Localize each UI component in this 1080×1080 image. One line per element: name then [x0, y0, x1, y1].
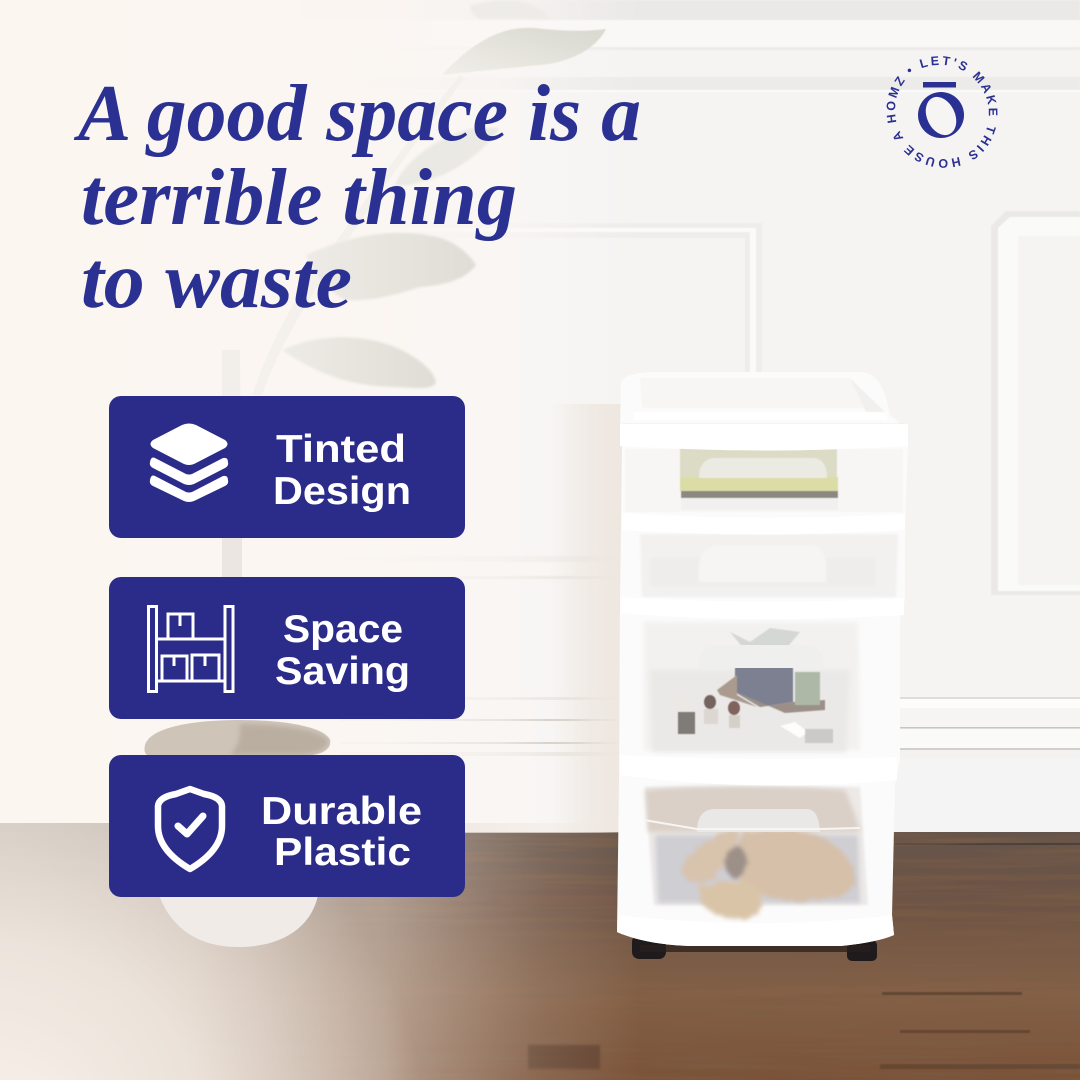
drawer 3 contents: toys [675, 628, 833, 743]
leaf: upper [442, 28, 606, 75]
cart body silhouette [617, 372, 908, 946]
baseboard [0, 695, 1080, 843]
logo badge [886, 56, 998, 168]
background: wall [0, 0, 1080, 850]
wall mouldings [300, 0, 1080, 595]
cart shadow on wall [550, 404, 622, 832]
label [261, 790, 422, 874]
label: Design [273, 470, 411, 513]
drawer 4 contents: teddy bear [682, 829, 856, 920]
icon: shelf with boxes [148, 606, 233, 692]
title: to waste [81, 237, 352, 325]
drawer 2 [640, 534, 898, 597]
plant stems [222, 350, 242, 577]
logo circular text: • LET'S MAKE THIS HOUSE A HOMZ [886, 56, 998, 168]
cart top lid [622, 378, 906, 424]
cart rims [617, 424, 908, 946]
label [273, 428, 411, 513]
wood floor [0, 823, 1080, 1080]
left fade overlay on wall [0, 0, 640, 823]
drawer 2 handle [699, 546, 826, 582]
feature card: Tinted Design [109, 396, 465, 538]
title: A good space is a [73, 70, 641, 158]
label: Tinted [276, 428, 406, 471]
cart wheels [632, 935, 877, 961]
decorative plant [222, 0, 606, 577]
left fade overlay on floor [0, 823, 640, 1080]
product: plastic drawer cart [617, 372, 908, 961]
leaf: middle upper [395, 128, 500, 186]
drawer 1 contents: olive box [680, 447, 838, 510]
label: Saving [275, 650, 410, 693]
plant pot [145, 720, 330, 947]
drawer 4 [644, 786, 868, 920]
leaf: middle [306, 233, 476, 300]
icon: layers [150, 424, 228, 502]
icon: shield with check [158, 789, 222, 869]
label: Durable [261, 790, 422, 833]
wall fade above floor, right of the left floor edge [465, 823, 640, 833]
label: Plastic [274, 831, 411, 874]
title [73, 70, 641, 325]
drawer 3 [644, 622, 860, 752]
feature card: Durable Plastic [109, 755, 465, 897]
leaf: top [470, 0, 551, 19]
title: terrible thing [81, 154, 517, 242]
logo mark [918, 82, 964, 140]
drawer 1 [625, 447, 903, 512]
bottom-left corner fade [0, 823, 500, 1080]
drawer 1 handle [699, 458, 827, 478]
label [275, 608, 410, 693]
label: Space [283, 608, 403, 651]
drawer 4 handle [697, 809, 820, 832]
drawer 3 handle [698, 645, 824, 668]
feature card: Space Saving [109, 577, 465, 719]
leaf: lower [282, 337, 436, 388]
